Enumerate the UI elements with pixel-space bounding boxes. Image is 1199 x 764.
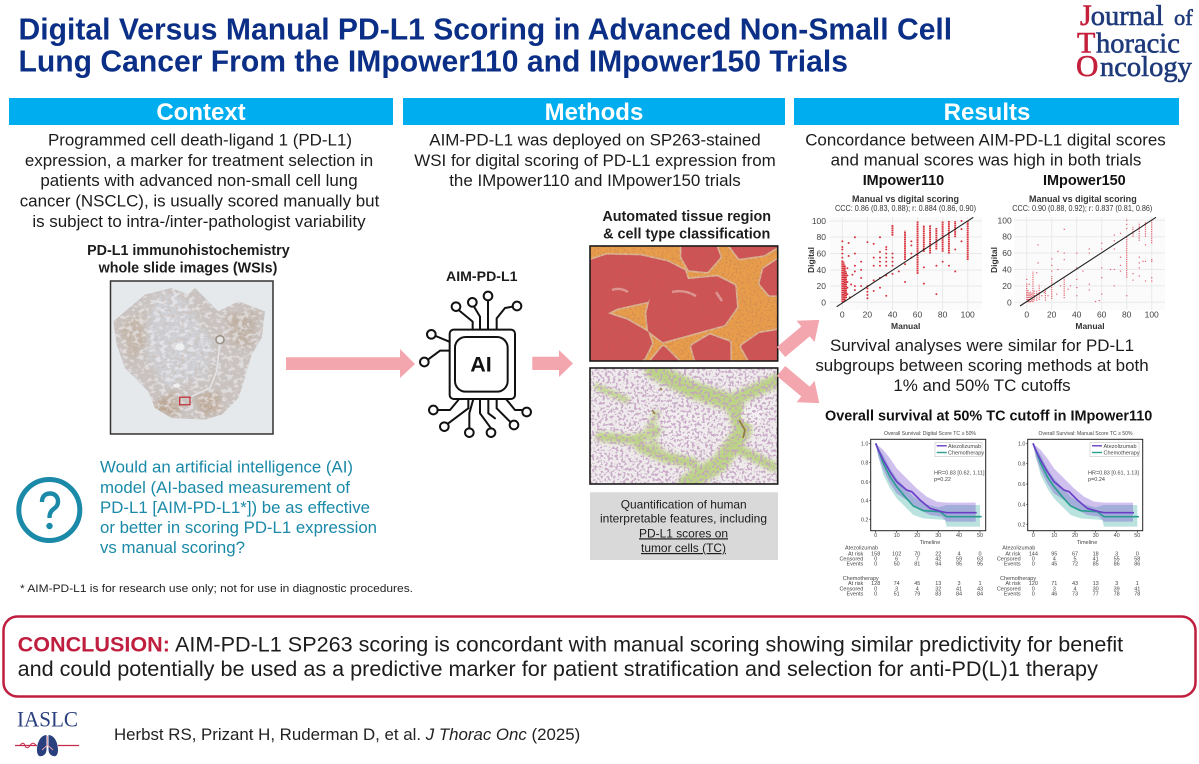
risk table: Chemotherapy [1000,576,1036,582]
risk table: 39 [1114,586,1120,592]
risk table: 0 [874,586,877,592]
risk table: 95 [977,562,983,568]
heading: results [794,98,1179,126]
scatter chart: IMpower150: 60 [1097,309,1107,319]
risk table: 0 [1032,562,1035,568]
heading: whole slide images: PD-L1 immunohistochemistry [87,243,290,259]
text block: methods description: WSI for digital scoring of PD-L1 expression from [414,151,776,170]
risk table: 4 [1053,557,1056,563]
title [18,14,952,78]
survival chart: manual score: 0.6 [1018,482,1026,488]
text block: context description: Programmed cell death-ligand 1 (PD-L1) [48,130,352,150]
survival chart: digital score: 10 [894,533,900,539]
risk table: Events [1004,562,1021,568]
risk table: At risk [848,581,864,587]
survival chart: manual score: 30 [1093,533,1099,539]
risk table: 7 [916,557,919,563]
legend [935,442,984,457]
survival chart: manual score: 0 [1032,533,1035,539]
risk table: 50 [894,562,900,568]
risk table: 13 [935,581,941,587]
text block: context description: expression, a marker for treatment selection in [25,151,373,170]
survival chart: digital score: HR=0.83 [0.62, 1.11] [934,471,985,477]
scatter chart: IMpower110: 60 [817,248,826,258]
text block: research question: or better in scoring PD-L1 expression [100,518,377,537]
risk table: 85 [1093,562,1099,568]
text block: concordance: Concordance between AIM-PD-L1 digital scores [805,130,1166,150]
title: Lung Cancer From the IMpower110 and IMpower150 Trials [18,46,848,78]
risk table: 144 [1029,551,1038,557]
risk table: 95 [956,562,962,568]
heading: tissue classification: Automated tissue region [602,209,771,225]
survival chart: digital score: 0.2 [861,517,868,523]
survival chart: manual score: Overall Survival: Manual Score TC ≥ 50% [1038,431,1133,437]
scatter chart: IMpower110: 80 [938,309,948,319]
risk table: 43 [977,586,983,592]
risk table: 72 [1072,562,1078,568]
text block: methods description [414,130,776,190]
text block: research question: PD-L1 [AIM-PD-L1*]) be as effective [100,498,370,517]
icon: AI chip [420,292,531,437]
scatter chart: IMpower150: Manual vs digital scoring [1029,194,1137,205]
legend: Atezolizumab [1104,444,1137,450]
risk table: 41 [1093,557,1099,563]
panel: methods [403,98,785,560]
risk table: 0 [1032,586,1035,592]
survival chart: manual score: HR=0.83 [0.61, 1.13] [1088,471,1139,477]
risk table [839,546,983,597]
risk table: 84 [956,591,962,597]
risk table: 41 [1134,586,1140,592]
arrow: AI to classification [532,350,573,377]
risk table: At risk [848,551,864,557]
label: AIM-PD-L1: AIM-PD-L1 [446,268,518,284]
scatter chart: IMpower150: Manual [1075,321,1105,331]
scatter chart: IMpower110: 20 [817,281,826,291]
risk table: 79 [914,591,920,597]
scatter chart: IMpower110: Digital [806,247,816,273]
survival chart: digital score: 40 [956,533,962,539]
text block: research question: vs manual scoring? [100,538,245,557]
heading: results: Results [944,99,1030,126]
risk table: 46 [1051,591,1057,597]
risk table: Censored [997,586,1021,592]
risk table: 71 [1051,581,1057,587]
scatter chart: IMpower150: Digital [989,247,999,273]
image: tissue region classification [587,243,780,365]
survival chart: manual score: 40 [1114,533,1120,539]
scatter chart: IMpower150: 20 [1047,309,1057,319]
risk table: 94 [935,562,941,568]
scatter chart: IMpower110: 0 [840,309,845,319]
scatter chart: IMpower110: Manual [891,321,920,331]
risk table: 4 [1073,586,1077,592]
risk table: Atezolizumab [845,546,878,552]
logo: IASLC: IASLC [17,707,78,732]
text block: methods description: the IMpower110 and IMpower150 trials [449,171,741,190]
risk table: 84 [977,591,983,597]
logo: Journal of Thoracic Oncology: T [1077,26,1095,60]
text block: context description: cancer (NSCLC), is usually scored manually but [20,192,380,210]
legend: Atezolizumab [948,444,981,450]
risk table: 0 [978,551,982,557]
risk table: 51 [894,591,900,597]
heading: context [9,98,393,126]
panel: conclusion: CONCLUSION: [18,632,170,657]
risk table: 55 [1114,557,1120,563]
scatter chart: IMpower150: 0 [1007,297,1012,307]
scatter chart: IMpower110: 100 [961,309,975,319]
risk table: 0 [874,591,877,597]
risk table: 22 [935,551,941,557]
scatter chart: IMpower150: 20 [1002,281,1012,291]
risk table: Events [846,591,864,597]
legend: Chemotherapy [948,450,984,456]
risk table: 18 [1093,551,1099,557]
risk table: 63 [977,557,983,563]
citation: Herbst RS, Prizant H, Ruderman D, et al. J Thorac Onc (2025) [114,725,580,744]
scatter chart: IMpower150: 0 [1024,309,1029,319]
survival chart: manual score: 1.0 [1018,441,1026,447]
footnote: * AIM-PD-L1 is for research use only; not for use in diagnostic procedures. [20,583,413,595]
risk table: 67 [1072,551,1078,557]
text block: methods description: AIM-PD-L1 was deployed on SP263-stained [429,130,761,150]
risk table: Events [846,562,864,568]
survival chart: manual score: p=0.24 [1088,477,1105,483]
survival chart: digital score: 1.0 [861,441,868,447]
image: cell type classification [590,368,778,484]
risk table: Censored [839,586,863,592]
survival chart: digital score: 20 [914,533,920,539]
risk table [997,546,1140,597]
heading: tissue classification [602,209,771,242]
survival chart: digital score: Overall Survival: Digital Score TC ≥ 50% [884,431,976,437]
scatter chart: IMpower110: 20 [863,309,872,319]
risk table: 0 [1032,591,1035,597]
risk table: 86 [1114,562,1120,568]
risk table: 77 [1093,591,1099,597]
risk table: 128 [871,581,880,587]
logo: Journal of Thoracic Oncology: ournal [1091,1,1164,32]
risk table: 81 [914,562,920,568]
risk table: 45 [914,581,920,587]
heading: whole slide images: whole slide images (WSIs) [98,261,278,277]
risk table: 32 [935,586,941,592]
risk table: 95 [1051,551,1057,557]
panel: conclusion: and could potentially be used as a predictive marker for patient stratification and selection for anti-PD(L)1 therapy [18,656,1098,681]
scatter chart: IMpower110: 40 [888,309,897,319]
heading: whole slide images [87,243,290,277]
logo: Journal of Thoracic Oncology: of [1174,5,1193,30]
scatter chart: IMpower150: CCC: 0.90 (0.88, 0.92); r: 0.837 (0.81, 0.86) [1012,204,1153,213]
text block: survival analyses: subgroups between scoring methods at both [815,356,1149,375]
scatter chart: IMpower150: 40 [1002,264,1012,274]
callout: region of interest [180,397,190,405]
risk table: 83 [935,591,941,597]
callout: quantification [590,492,778,560]
text block: concordance [805,130,1166,170]
text block: survival analyses: 1% and 50% TC cutoffs [893,376,1071,395]
logo: IASLC [15,707,79,756]
text block: survival analyses: Survival analyses were similar for PD-L1 [830,336,1134,355]
risk table: 58 [1134,557,1140,563]
risk table: 70 [914,551,920,557]
risk table: 13 [1093,581,1099,587]
scatter chart: IMpower110: 80 [817,232,826,242]
scatter chart: IMpower110: 0 [821,297,826,307]
heading: tissue classification: & cell type classification [603,226,770,242]
risk table: 5 [1073,557,1077,563]
risk table: Chemotherapy [843,576,879,582]
heading: methods: Methods [545,99,643,126]
risk table: 6 [895,557,898,563]
scatter chart: IMpower150 [989,194,1165,331]
risk table: 120 [1029,581,1038,587]
callout: quantification: interpretable features, including [600,512,767,526]
risk table: 0 [1136,551,1139,557]
survival chart: digital score: 30 [935,533,941,539]
risk table: 1 [978,581,982,587]
image: PD-L1 whole slide tissue [105,278,273,434]
scatter chart: IMpower110: 40 [817,265,826,275]
survival chart: manual score: 0.4 [1018,502,1026,508]
survival chart: digital score: 0.4 [861,499,868,505]
heading: IMpower150: IMpower150 [1043,173,1126,189]
arrow: to concordance plots [772,309,828,363]
risk table: 1 [1136,581,1139,587]
scatter chart: IMpower110: CCC: 0.86 (0.83, 0.88); r: 0.884 (0.86, 0.90) [835,204,976,213]
risk table: 0 [1032,557,1035,563]
text block: concordance: and manual scores was high in both trials [831,150,1141,170]
survival chart: manual score: 0.2 [1018,522,1026,528]
survival chart: manual score [997,431,1143,597]
callout: quantification: Quantification of human [621,497,747,511]
text block: research question: model (AI-based measurement of [100,478,350,497]
risk table: 78 [1134,591,1140,597]
risk table: At risk [1005,551,1021,557]
text block: research question: Would an artificial intelligence (AI) [100,458,353,477]
risk table: 59 [956,557,962,563]
heading: context: Context [156,99,246,126]
scatter chart: IMpower110 [806,194,982,331]
risk table: 41 [956,586,962,592]
survival chart: manual score: 20 [1072,533,1078,539]
panel: results [794,98,1179,597]
survival chart: digital score: 50 [977,533,983,539]
logo: Journal of Thoracic Oncology: ncology [1100,52,1193,83]
survival chart: manual score: 50 [1134,533,1140,539]
risk table: 43 [1072,581,1078,587]
text block: context description: is subject to intra-/inter-pathologist variability [32,212,366,231]
risk table: 42 [935,557,941,563]
risk table: Censored [839,557,863,563]
risk table: Censored [997,557,1021,563]
heading: overall survival: Overall survival at 50% TC cutoff in IMpower110 [825,409,1152,425]
risk table: 45 [1051,562,1057,568]
risk table: 0 [874,557,877,563]
risk table: 102 [892,551,901,557]
survival chart: digital score: Timeline [920,540,940,546]
risk table: 158 [871,551,880,557]
scatter chart: IMpower150: 80 [1002,232,1012,242]
survival chart: digital score: 0.6 [861,480,868,486]
scatter chart: IMpower150: 100 [998,215,1012,225]
risk table: 3 [1115,581,1118,587]
risk table: 3 [957,581,961,587]
logo: Journal of Thoracic Oncology: O [1076,48,1098,83]
survival chart: manual score: 0.8 [1018,462,1026,468]
text block: survival analyses [815,336,1149,395]
heading: IMpower110: IMpower110 [863,173,944,189]
survival chart: digital score [839,431,986,597]
callout: quantification: PD-L1 scores on [639,526,728,540]
text block: context description [20,130,380,231]
risk table: 4 [957,551,961,557]
panel: context [9,98,413,595]
risk table: Atezolizumab [1002,546,1035,552]
risk table: 3 [1053,586,1056,592]
survival chart: digital score: 0.8 [861,461,868,467]
risk table: 30 [1093,586,1099,592]
icon: question mark [19,480,80,540]
scatter chart: IMpower150: 40 [1072,309,1082,319]
risk table: 74 [894,581,900,587]
scatter chart: IMpower110: Manual vs digital scoring [852,194,959,205]
panel: conclusion: AIM-PD-L1 SP263 scoring is concordant with manual scoring showing similar predictivity for benefit [175,632,1123,657]
panel: conclusion [4,616,1196,696]
survival chart: digital score: 0 [874,533,877,539]
arrow: slides to AI [286,349,415,378]
scatter chart: IMpower110: 100 [812,216,826,226]
text block: context description: patients with advanced non-small cell lung [40,171,358,190]
title: Digital Versus Manual PD-L1 Scoring in Advanced Non-Small Cell [18,14,952,46]
icon: AI chip: AI [470,352,492,376]
risk table: 3 [1115,551,1118,557]
arrow: to survival analyses [772,360,828,414]
risk table: 73 [1072,591,1078,597]
logo: Journal of Thoracic Oncology: horacic [1096,28,1180,60]
logo: Journal of Thoracic Oncology [1076,0,1193,83]
risk table: 4 [916,586,919,592]
risk table: 3 [895,586,898,592]
scatter chart: IMpower150: 80 [1122,309,1132,319]
risk table: 0 [874,562,877,568]
text block: research question [100,458,377,557]
survival chart: digital score: p=0.22 [934,477,951,483]
heading: methods [403,98,785,126]
legend [1090,442,1140,457]
survival chart: manual score: Timeline [1077,540,1097,546]
scatter chart: IMpower150: 60 [1002,248,1012,258]
survival chart: manual score: 10 [1051,533,1057,539]
callout: quantification: tumor cells (TC) [641,541,726,555]
risk table: 78 [1114,591,1120,597]
risk table: 86 [1134,562,1140,568]
risk table: Events [1004,591,1021,597]
legend: Chemotherapy [1104,450,1140,456]
scatter chart: IMpower110: 60 [913,309,922,319]
risk table: At risk [1005,581,1021,587]
scatter chart: IMpower150: 100 [1145,309,1159,319]
